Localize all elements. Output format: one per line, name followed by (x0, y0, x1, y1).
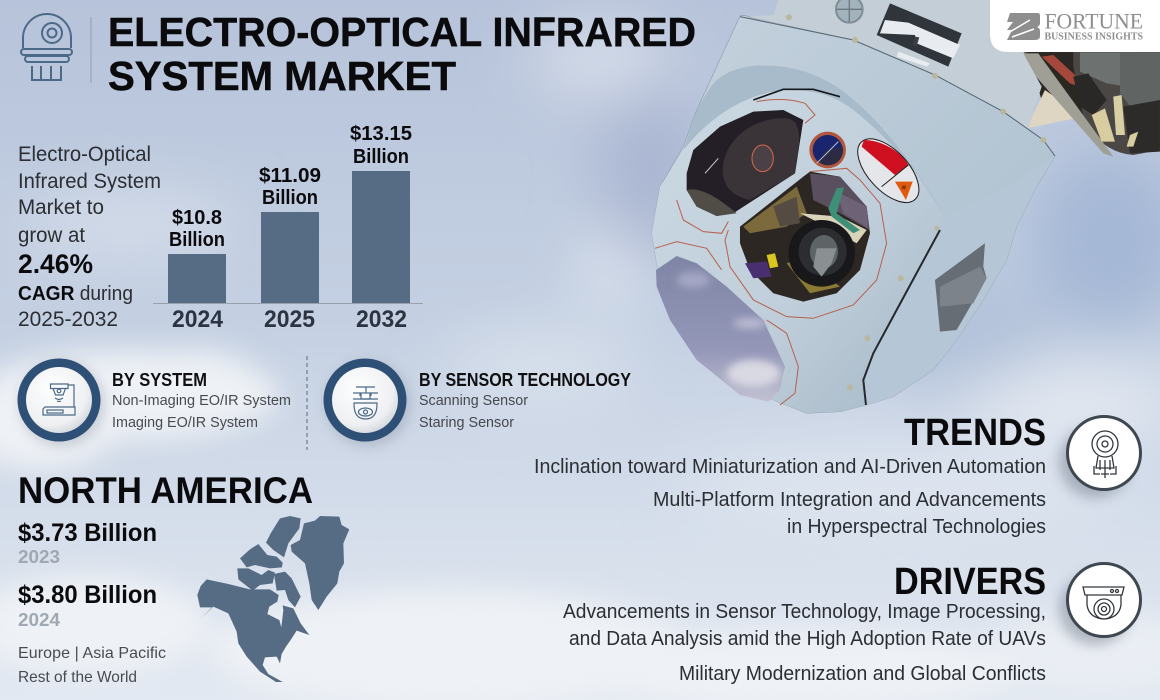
panel: drivers: DRIVERS (894, 561, 1046, 603)
panel: drivers: Military Modernization and Global Conflicts (679, 663, 1046, 685)
bar chart: Billion (262, 187, 318, 209)
logo mark (1007, 13, 1040, 40)
machinery behind turret (1023, 50, 1160, 157)
panel: trends: Inclination toward Miniaturization and AI-Driven Automation (534, 456, 1046, 478)
icon: sensor disc (324, 358, 410, 446)
panel: north america: $3.80 Billion (18, 581, 157, 609)
upper dark window (687, 110, 803, 216)
panel: drivers: and Data Analysis amid the High Adoption Rate of UAVs (569, 628, 1046, 650)
CAGR text block: 2025-2032 (18, 308, 118, 331)
logo panel: BUSINESS INSIGHTS (1044, 32, 1143, 42)
title: ELECTRO-OPTICAL INFRARED (108, 9, 696, 55)
CAGR text block: Electro-Optical (18, 143, 151, 166)
panel: by sensor technology (324, 358, 631, 446)
panel: by system: Imaging EO/IR System (112, 414, 258, 431)
logo panel (990, 0, 1160, 52)
baffin (240, 544, 283, 568)
panel: north america: Europe | Asia Pacific (18, 645, 166, 662)
panel: north america: 2023 (18, 547, 60, 567)
large lens window with electronics (740, 172, 870, 302)
panel: by sensor technology: Staring Sensor (419, 414, 514, 431)
icon: trends camera badge (1059, 416, 1140, 498)
CAGR text block: grow at (18, 224, 85, 247)
panel: trends: Multi-Platform Integration and Advancements (653, 489, 1046, 511)
side panel (863, 156, 1055, 405)
bar chart (153, 123, 423, 333)
viewport top (836, 0, 863, 23)
panel: by system: Non-Imaging EO/IR System (112, 392, 291, 409)
body bolts (786, 14, 1046, 390)
title: SYSTEM MARKET (108, 53, 456, 99)
panel: north america (18, 470, 313, 686)
panel: north america: $3.73 Billion (18, 519, 157, 547)
bar chart: Billion (169, 229, 225, 251)
dark marking (935, 243, 987, 332)
arctic archipelago west (237, 568, 275, 591)
data plate (877, 3, 962, 67)
bar chart: $10.8 (172, 207, 222, 229)
icon: drivers camera badge (1059, 564, 1140, 645)
bar chart: 2025 (264, 306, 315, 333)
orange seams (655, 100, 887, 405)
CAGR text block (18, 143, 161, 331)
lower sky-reflecting window (656, 256, 785, 402)
bar chart: $13.15 (350, 123, 412, 145)
arctic archipelago east (274, 572, 301, 607)
bar chart: $11.09 (259, 165, 321, 187)
panel: trends (534, 412, 1046, 538)
panel: by sensor technology: Scanning Sensor (419, 392, 528, 409)
sphere (652, 90, 945, 413)
panel: by sensor technology: BY SENSOR TECHNOLOGY (419, 370, 631, 390)
panel: by system (18, 358, 291, 446)
ellesmere (266, 516, 301, 557)
greenland (291, 516, 349, 610)
panel: trends: TRENDS (904, 412, 1046, 454)
panel: north america: Rest of the World (18, 669, 137, 686)
turret hood (652, 15, 1055, 413)
icon: system disc (18, 358, 104, 446)
bar chart: 2024 (172, 306, 224, 333)
title (108, 9, 696, 99)
map: north america (197, 516, 349, 682)
turret collar (740, 0, 1053, 155)
turret camera (652, 0, 1055, 413)
icon: turret header (21, 14, 72, 80)
panel: north america: NORTH AMERICA (18, 470, 313, 511)
logo wordmark: FORTUNE (1044, 8, 1143, 34)
bar chart: 2032 (356, 306, 407, 333)
mainland (197, 579, 309, 682)
CAGR text block: Infrared System (18, 170, 161, 193)
warning sticker (847, 128, 930, 213)
CAGR text block: Market to (18, 196, 104, 219)
panel: by system: BY SYSTEM (112, 370, 207, 390)
bar chart: Billion (353, 146, 409, 168)
panel: drivers (563, 561, 1046, 685)
panel: trends: in Hyperspectral Technologies (787, 516, 1046, 538)
panel: north america: 2024 (18, 610, 60, 630)
CAGR text block: CAGR during (18, 283, 133, 305)
CAGR text block: 2.46% (18, 249, 93, 279)
small blue lens (809, 132, 846, 168)
panel: drivers: Advancements in Sensor Technology, Image Processing, (563, 601, 1046, 623)
